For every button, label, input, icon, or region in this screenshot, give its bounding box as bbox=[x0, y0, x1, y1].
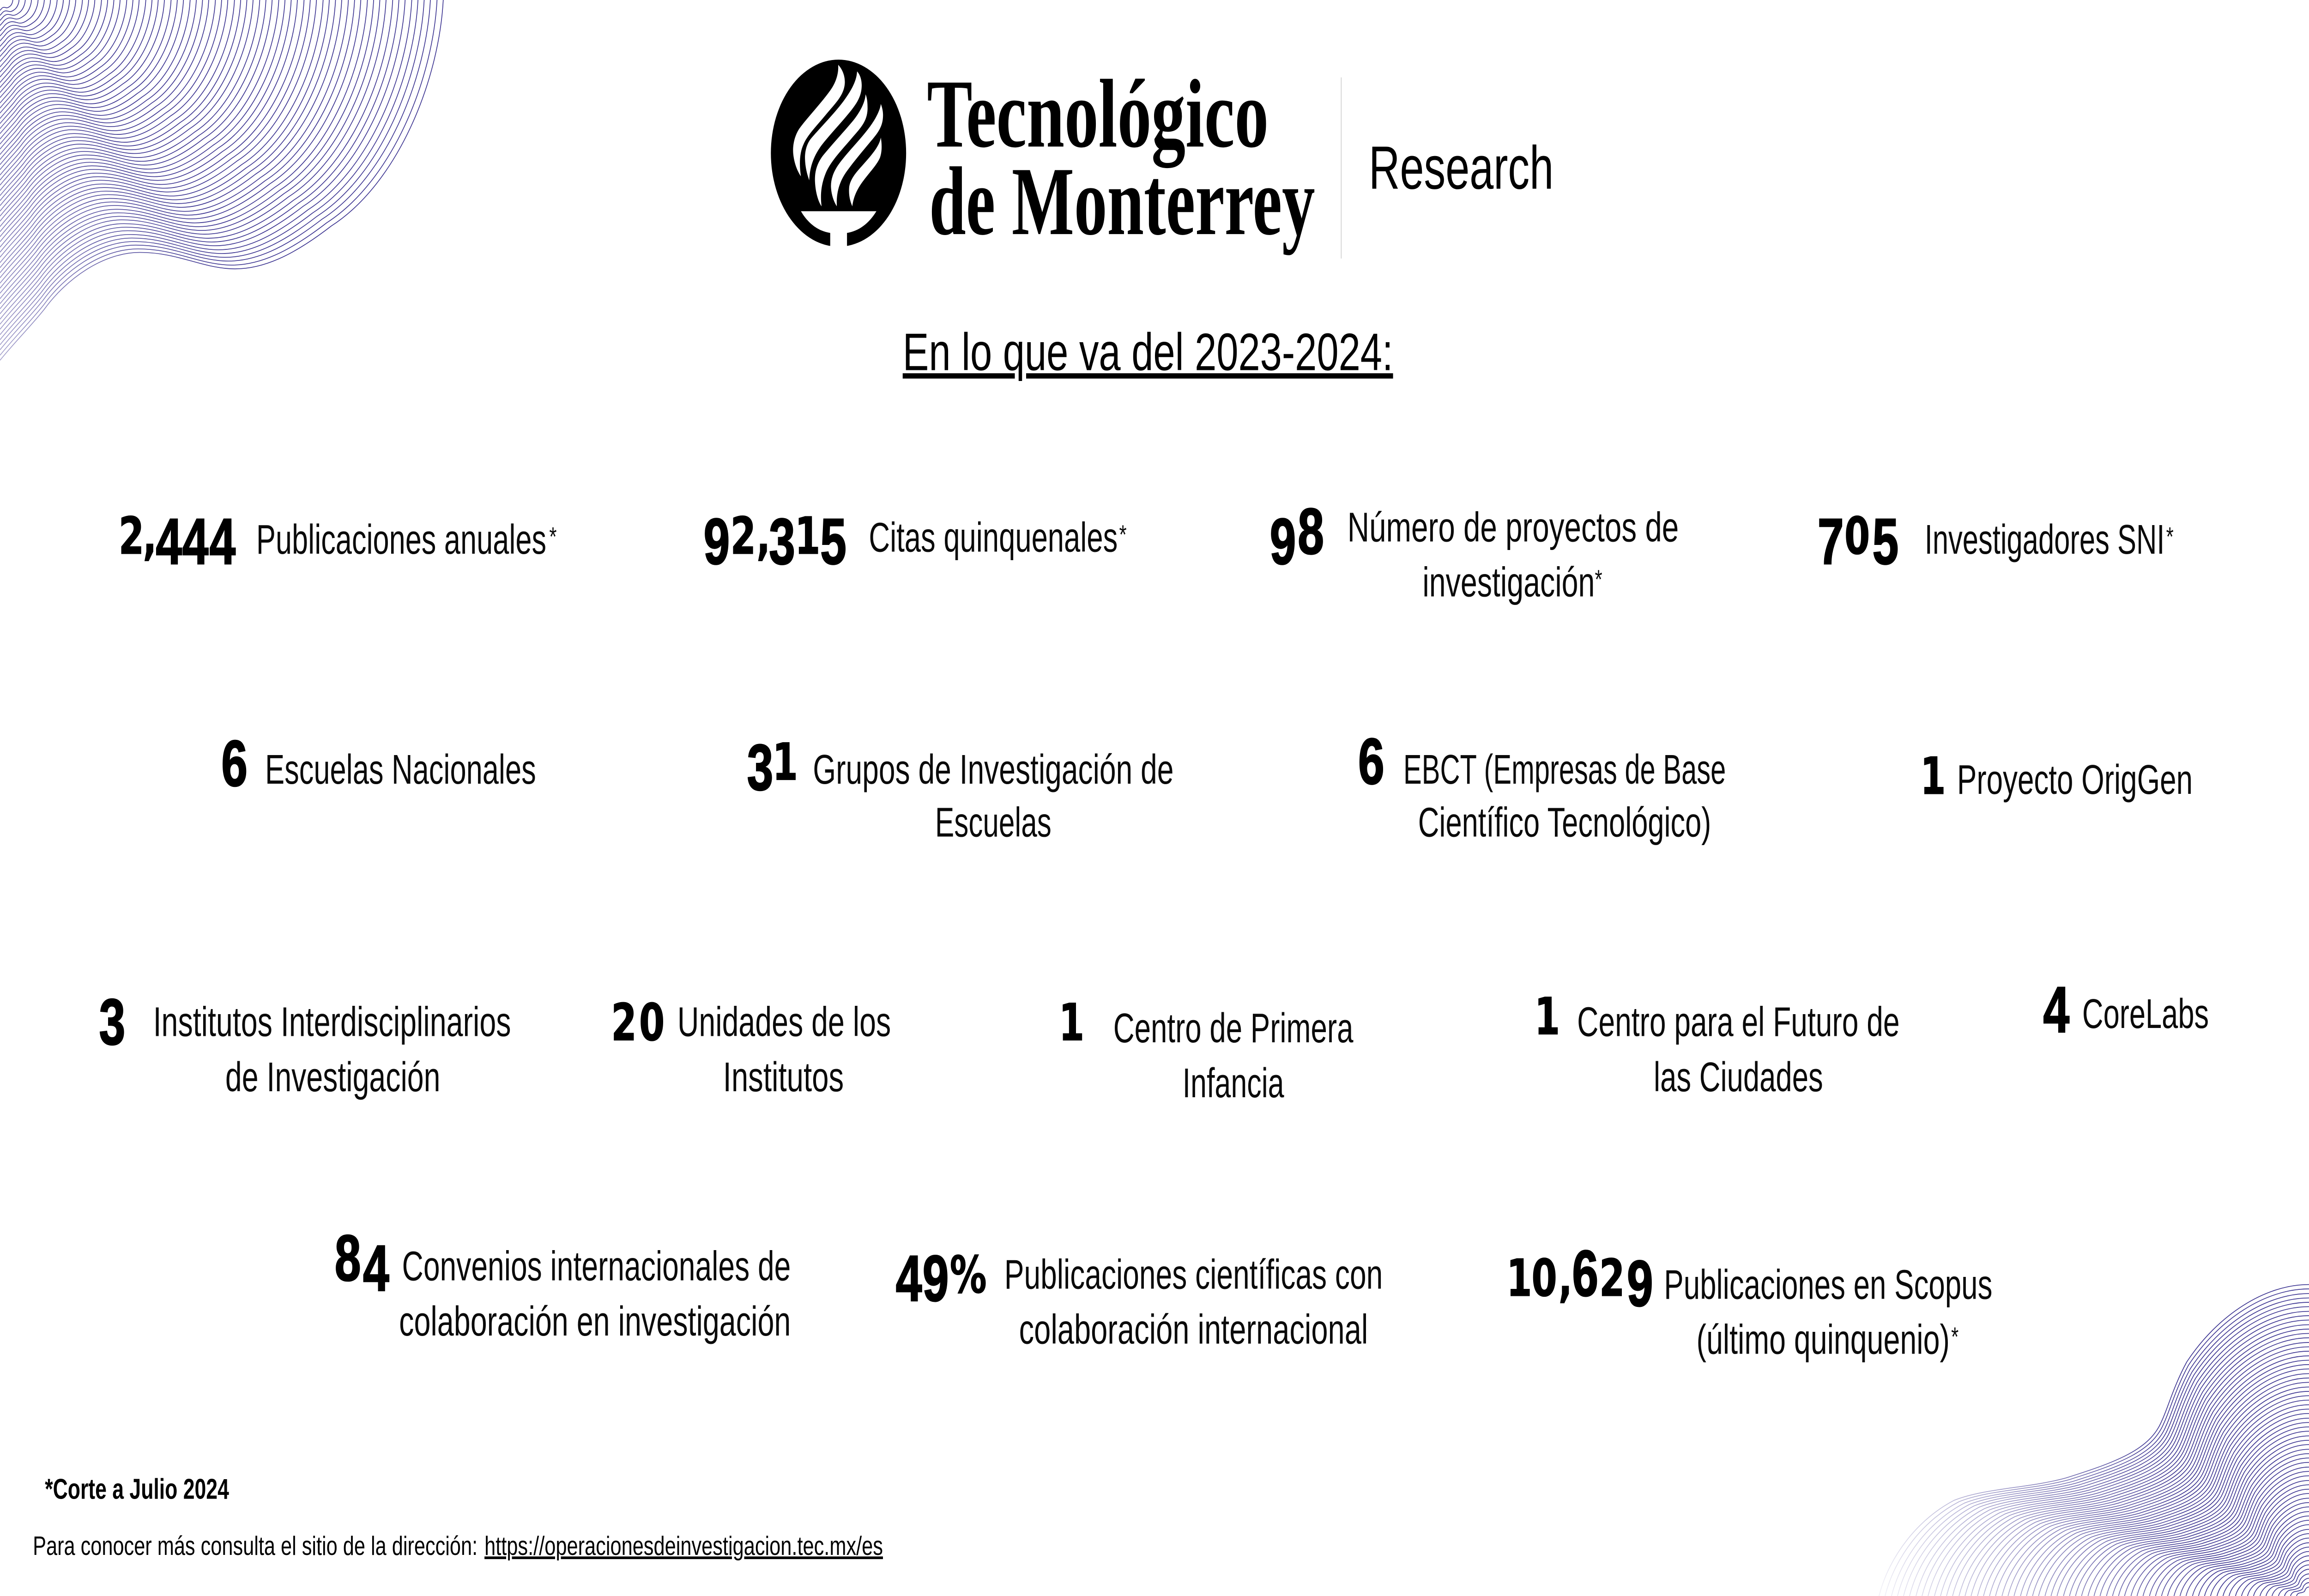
stat: citas quinquenales: 5 bbox=[820, 506, 846, 578]
stat: unidades de los institutos bbox=[611, 993, 891, 1100]
stat: publicaciones con colaboración internacional: 9 bbox=[923, 1243, 949, 1315]
stat: convenios internacionales: colaboración en investigación bbox=[399, 1298, 791, 1344]
stat: publicaciones en Scopus: Publicaciones en Scopus bbox=[1664, 1261, 1992, 1308]
stat: publicaciones en Scopus: * bbox=[1951, 1322, 1958, 1351]
stat: publicaciones en Scopus: , bbox=[1559, 1249, 1572, 1308]
stat: centro de primera infancia: 1 bbox=[1059, 993, 1084, 1052]
footnote: corte: *Corte a Julio 2024 bbox=[45, 1473, 229, 1505]
stat: EBCT: 6 bbox=[1358, 725, 1384, 798]
stat: proyectos de investigación: 9 bbox=[1270, 506, 1296, 578]
stat: publicaciones en Scopus: 2 bbox=[1599, 1249, 1625, 1308]
stat: proyecto OrigGen: 1 bbox=[1920, 747, 1946, 806]
stat: citas quinquenales: , bbox=[756, 507, 770, 566]
stat: publicaciones con colaboración internacional: Publicaciones científicas con bbox=[1004, 1251, 1383, 1298]
footer: link text bbox=[33, 1531, 883, 1561]
stat: investigadores SNI: 5 bbox=[1873, 506, 1898, 578]
stat: citas quinquenales: 3 bbox=[769, 506, 795, 578]
stat: unidades de los institutos: Unidades de los bbox=[677, 998, 891, 1045]
stat: publicaciones con colaboración internacional bbox=[896, 1243, 1383, 1353]
stat: citas quinquenales: 2 bbox=[731, 507, 756, 566]
stat: EBCT bbox=[1358, 725, 1726, 846]
stat: institutos interdisciplinarios bbox=[99, 986, 511, 1100]
stat: publicaciones en Scopus: 9 bbox=[1627, 1248, 1653, 1320]
stat: corelabs bbox=[2043, 974, 2209, 1046]
stat: centro para el futuro de las ciudades: Centro para el Futuro de bbox=[1577, 998, 1900, 1045]
stat: proyectos de investigación: investigación bbox=[1422, 559, 1595, 605]
stat: publicaciones en Scopus: 1 bbox=[1506, 1249, 1532, 1308]
logo wordmark bbox=[927, 59, 1315, 255]
stat: publicaciones anuales: 4 bbox=[156, 506, 182, 578]
stat: publicaciones con colaboración internacional: % bbox=[950, 1245, 987, 1305]
stat: centro de primera infancia bbox=[1059, 993, 1354, 1106]
stat: corelabs: CoreLabs bbox=[2082, 991, 2209, 1037]
stat: proyecto OrigGen: Proyecto OrigGen bbox=[1957, 756, 2193, 803]
decorative wave: top left bbox=[0, 0, 443, 360]
stat: centro de primera infancia: Infancia bbox=[1183, 1060, 1284, 1106]
stat: publicaciones con colaboración internacional: 4 bbox=[896, 1243, 922, 1315]
stat: publicaciones anuales bbox=[119, 506, 557, 578]
stat: investigadores SNI bbox=[1818, 506, 2174, 578]
stat: unidades de los institutos: 0 bbox=[639, 993, 665, 1052]
stat: escuelas nacionales: 6 bbox=[221, 728, 248, 800]
stat: publicaciones en Scopus: 6 bbox=[1572, 1238, 1598, 1310]
stat: publicaciones anuales: 4 bbox=[209, 506, 236, 578]
stat: escuelas nacionales bbox=[221, 728, 536, 800]
stat: proyectos de investigación: Número de proyectos de bbox=[1348, 504, 1679, 550]
stat: publicaciones anuales: * bbox=[549, 522, 557, 551]
stat: convenios internacionales: Convenios internacionales de bbox=[402, 1243, 791, 1289]
stat: publicaciones en Scopus: (último quinquenio) bbox=[1696, 1316, 1950, 1363]
stat: escuelas nacionales: Escuelas Nacionales bbox=[265, 746, 536, 793]
stat: institutos interdisciplinarios: 3 bbox=[99, 986, 125, 1058]
stat: convenios internacionales: 4 bbox=[363, 1233, 389, 1305]
stat: centro para el futuro de las ciudades bbox=[1535, 987, 1900, 1100]
stat: grupos de investigación: Grupos de Investigación de bbox=[813, 746, 1173, 793]
footer: link text: https://operacionesdeinvestigacion.tec.mx/es bbox=[484, 1531, 883, 1561]
stat: publicaciones anuales: 2 bbox=[119, 507, 144, 566]
stat: investigadores SNI: 7 bbox=[1818, 506, 1844, 578]
stat: corelabs: 4 bbox=[2043, 974, 2069, 1046]
stat: publicaciones con colaboración internacional: colaboración internacional bbox=[1019, 1306, 1368, 1353]
logo: Research: Research bbox=[1369, 134, 1553, 202]
stat: citas quinquenales: * bbox=[1119, 520, 1127, 550]
logo wordmark: Tecnológico bbox=[927, 59, 1269, 168]
decorative wave: bottom right bbox=[1879, 1285, 2309, 1596]
stat: grupos de investigación: 3 bbox=[747, 732, 773, 804]
stat: convenios internacionales: 8 bbox=[335, 1222, 361, 1295]
stat: institutos interdisciplinarios: de Investigación bbox=[225, 1053, 440, 1100]
stat: institutos interdisciplinarios: Institutos Interdisciplinarios bbox=[153, 998, 511, 1045]
stat: citas quinquenales bbox=[704, 506, 1127, 578]
stat: grupos de investigación: 1 bbox=[773, 732, 798, 792]
title: En lo que va del 2023-2024: bbox=[903, 322, 1393, 382]
stat: citas quinquenales: 9 bbox=[704, 506, 730, 578]
stat: publicaciones en Scopus bbox=[1506, 1238, 1992, 1363]
stat: investigadores SNI: 0 bbox=[1844, 507, 1870, 566]
stat: EBCT: EBCT (Empresas de Base bbox=[1403, 746, 1726, 793]
stat: citas quinquenales: Citas quinquenales bbox=[869, 514, 1118, 561]
stat: grupos de investigación: Escuelas bbox=[935, 799, 1052, 846]
stat: centro para el futuro de las ciudades: 1 bbox=[1535, 987, 1560, 1046]
logo wordmark: de Monterrey bbox=[929, 147, 1315, 255]
stat: proyectos de investigación bbox=[1270, 496, 1679, 605]
stat: convenios internacionales bbox=[335, 1222, 791, 1344]
stat: citas quinquenales: 1 bbox=[795, 507, 820, 566]
footer: link text: Para conocer más consulta el sitio de la dirección: bbox=[33, 1531, 478, 1561]
stat: publicaciones anuales: 4 bbox=[182, 506, 209, 578]
stat: publicaciones anuales: Publicaciones anuales bbox=[256, 516, 546, 562]
stat: publicaciones anuales: , bbox=[143, 507, 157, 566]
stat: centro para el futuro de las ciudades: las Ciudades bbox=[1654, 1053, 1823, 1100]
logo: Tecnológico de Monterrey Research bbox=[771, 59, 1553, 259]
icon: torch emblem bbox=[771, 60, 906, 248]
stat: investigadores SNI: * bbox=[2166, 522, 2174, 551]
stat: unidades de los institutos: 2 bbox=[611, 993, 637, 1052]
stat: EBCT: Científico Tecnológico) bbox=[1418, 799, 1711, 846]
stat: centro de primera infancia: Centro de Primera bbox=[1113, 1005, 1354, 1051]
stat: grupos de investigación bbox=[747, 732, 1173, 846]
stat: unidades de los institutos: Institutos bbox=[723, 1053, 844, 1100]
stat: proyectos de investigación: * bbox=[1595, 564, 1602, 594]
stat: proyectos de investigación: 8 bbox=[1298, 496, 1324, 568]
stat: proyecto OrigGen bbox=[1920, 747, 2193, 806]
stat: publicaciones en Scopus: 0 bbox=[1531, 1249, 1557, 1308]
stat: investigadores SNI: Investigadores SNI bbox=[1925, 516, 2165, 562]
